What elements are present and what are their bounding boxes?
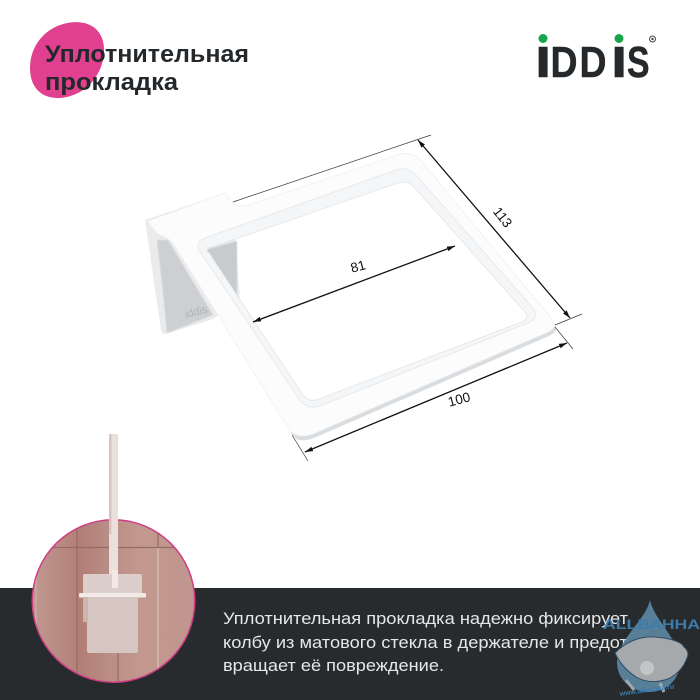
bracket shaded inner side <box>157 240 213 333</box>
brush handle <box>109 434 118 579</box>
dimension: 100 <box>305 343 567 452</box>
dimension: 81 <box>253 246 455 322</box>
dimension: 100: 100 <box>446 389 472 410</box>
dimension extension lines <box>233 135 582 461</box>
bathtub <box>615 637 688 682</box>
wall bracket body <box>145 193 240 334</box>
plate top face <box>148 154 554 436</box>
title: Уплотнительная <box>45 41 249 68</box>
holder shelf <box>79 593 146 598</box>
tile wall <box>33 520 194 682</box>
IDDIS logo: I <box>535 38 551 87</box>
heading with pink blob <box>30 22 249 98</box>
bracket engraving: iddis <box>184 304 209 321</box>
frosted glass flask <box>87 597 138 653</box>
tile grout <box>36 529 174 682</box>
IDDIS logo: S <box>627 38 650 87</box>
IDDIS logo <box>535 34 656 87</box>
bathtub face <box>640 661 654 675</box>
IDDIS logo: D <box>550 38 578 87</box>
watermark name: ALLВАННА <box>603 616 700 632</box>
dimension: 113: 113 <box>490 204 515 230</box>
IDDIS logo: I <box>611 38 627 87</box>
water drop <box>617 600 680 692</box>
product drawing: seal holder <box>145 154 556 440</box>
bottom dark band <box>0 588 700 700</box>
watermark url: www.allvanna.ru <box>618 683 675 698</box>
plate underside edge <box>290 322 556 440</box>
dimension: 81: 81 <box>349 257 367 276</box>
gasket ring <box>198 169 536 407</box>
IDDIS logo: D <box>580 38 606 87</box>
title: прокладка <box>45 69 178 96</box>
watermark: drop with bathtub <box>603 600 700 698</box>
frosted glass top <box>83 574 142 594</box>
description text: вращает её повреждение. <box>223 657 444 675</box>
description text: колбу из матового стекла в держателе и предот- <box>223 634 634 652</box>
description text: Уплотнительная прокладка надежно фиксирует <box>223 610 628 628</box>
shaded back seen through opening <box>205 241 237 310</box>
photo circle: brush holder on tiled wall <box>30 434 200 685</box>
dimension: 113 <box>418 140 570 318</box>
pink circle border <box>32 519 196 683</box>
pink blob <box>30 22 104 98</box>
bathtub feet <box>626 680 664 692</box>
